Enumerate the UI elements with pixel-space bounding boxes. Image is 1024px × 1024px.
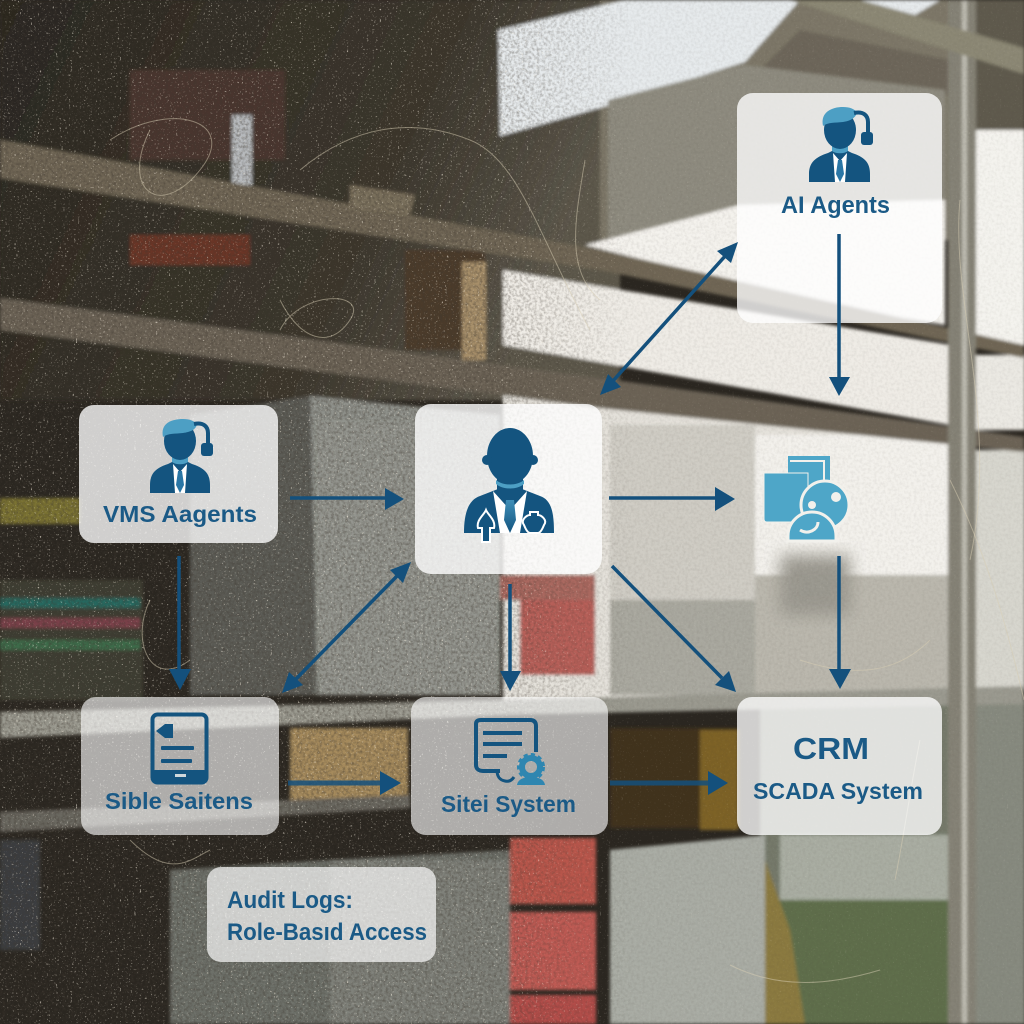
- label: Sible Saitens: Sible Saitens: [105, 788, 253, 814]
- label: Sitei System: Sitei System: [441, 791, 576, 817]
- panel: Audit Logs and Role-Based Access: [207, 867, 436, 962]
- panel: AI Agents: [737, 93, 942, 323]
- right strip: [975, 0, 1024, 130]
- panel: Sitei System: [411, 697, 608, 835]
- arrow: central to sible, two-way: [282, 562, 411, 693]
- arrow: sible to site: [288, 771, 401, 795]
- arrow: site to CRM: [610, 771, 728, 795]
- icon: message with gear: [476, 720, 545, 785]
- red bricks: [520, 600, 595, 675]
- icon: central operator: [464, 428, 554, 542]
- icon: VMS agent with headset: [150, 419, 213, 493]
- label: CRM: CRM: [793, 731, 869, 766]
- icon: tablet document: [152, 714, 207, 783]
- icon: shared documents and users: [764, 456, 849, 541]
- panel: central operator: [415, 404, 602, 574]
- shelf beams: [0, 140, 1024, 358]
- arrows: workflow connectors: [169, 234, 851, 795]
- mesh blocks: [190, 396, 500, 695]
- arrow: VMS to central: [290, 488, 404, 510]
- panel: Sible Saitens: [81, 697, 279, 835]
- label: Role-Basid Access: Role-Basıd Access: [227, 919, 427, 946]
- arrow: VMS down: [169, 556, 191, 690]
- scratches: [110, 119, 1024, 983]
- arrow: central to CRM diagonal: [612, 566, 736, 692]
- label: Audit Logs: Audit Logs:: [227, 887, 353, 914]
- arrow: documents to CRM: [829, 556, 851, 689]
- arrow: central to AI agents, two-way: [600, 242, 738, 395]
- label: AI Agents: AI Agents: [781, 192, 890, 219]
- icon: AI agent with headset: [809, 107, 873, 182]
- arrow: AI agents down: [829, 234, 850, 396]
- skylight patch: [498, 0, 800, 136]
- label: VMS Aagents: VMS Aagents: [103, 501, 257, 527]
- label: SCADA System: SCADA System: [753, 778, 923, 804]
- left shelf contents: [0, 498, 80, 524]
- panel: CRM SCADA System: [737, 697, 942, 835]
- window frame: [948, 0, 976, 1024]
- lower-right landscape: [760, 700, 950, 1024]
- panel: VMS Agents: [79, 405, 278, 543]
- arrow: central down: [500, 584, 521, 691]
- arrow: central to documents: [609, 487, 735, 511]
